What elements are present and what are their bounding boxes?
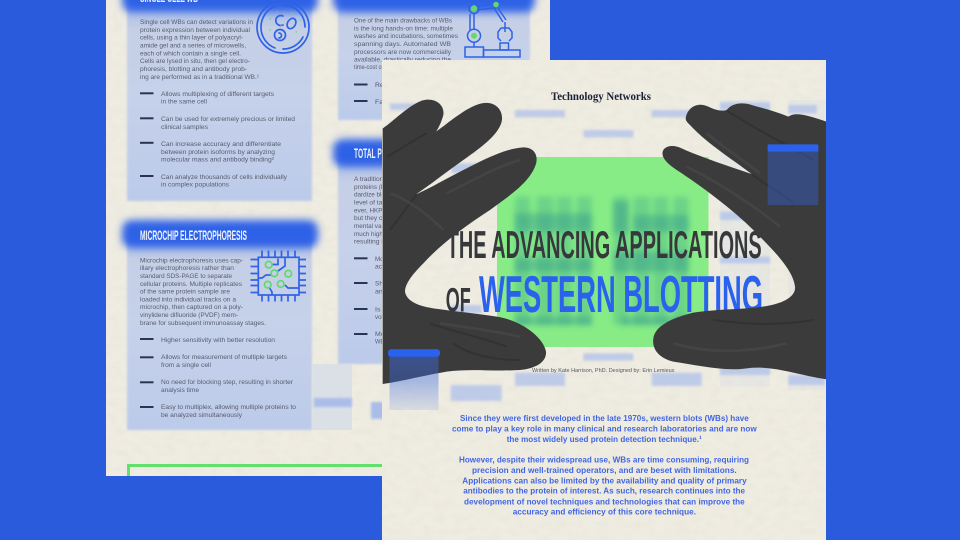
panel: automated WB: is the long hands-on time: multiple [354, 26, 453, 32]
icon: microchip [250, 250, 306, 302]
intro text: development of novel techniques and technologies that can improve the [464, 496, 745, 506]
title: OF [446, 282, 471, 320]
panel: automated WB: time-cost of the process [354, 64, 415, 71]
blue overlay square and bar, top right [768, 144, 818, 205]
intro text: However, despite their widespread use, WBs are time consuming, requiring [459, 455, 749, 465]
panel: microchip electrophoresis: from a single cell [161, 362, 212, 369]
panel: single cell WB: Can be used for extremely precious or limited [161, 116, 295, 123]
icon: cell [257, 1, 309, 53]
panel: automated WB: washes and incubations, sometimes [353, 33, 459, 40]
blue overlay and bar, bottom left [388, 349, 440, 410]
panel: microchip electrophoresis: brane for subsequent immunoassay stages. [140, 320, 266, 327]
icon: robot arm [465, 2, 520, 57]
panel: total protein normalization: WB quantitation [375, 338, 415, 346]
panel: total protein normalization [326, 132, 382, 365]
panel: microchip electrophoresis: vinylidene difluoride (PVDF) mem- [140, 312, 238, 319]
panel: total protein normalization: resulting in saturation [354, 238, 418, 246]
panel: single cell WB: Allows multiplexing of different targets [161, 91, 275, 98]
panel: single cell WB: in complex populations [161, 182, 230, 188]
panel: microchip electrophoresis: Microchip electrophoresis uses cap- [140, 257, 243, 264]
intro text [452, 413, 757, 517]
panel: microchip electrophoresis: Easy to multiplex, allowing multiple proteins to [161, 404, 296, 411]
panel: automated WB [333, 0, 535, 120]
back page [106, 0, 550, 476]
left glove [383, 100, 546, 384]
panel: microchip electrophoresis: MICROCHIP ELECTROPHORESIS [140, 227, 247, 243]
front page [382, 60, 827, 540]
panel: microchip electrophoresis: illary electrophoresis rather than [140, 265, 234, 272]
panel: single cell WB: amide gel and a series of microwells, [140, 42, 246, 50]
panel: total protein normalization: but they can also be experi- [354, 215, 434, 222]
panel: automated WB: spanning days. Automated WB [354, 41, 452, 48]
panel: total protein normalization: dardize blots and normalize the [354, 192, 442, 199]
panel: automated WB: One of the main drawbacks of WBs [354, 18, 453, 24]
panel: microchip electrophoresis: No need for blocking step, resulting in shorter [161, 379, 294, 386]
intro text: Since they were first developed in the late 1970s, western blots (WBs) have [460, 413, 749, 423]
intro text: come to play a key role in many clinical and research laboratories and are now [452, 424, 757, 434]
panel: single cell WB: protein expression between individual [140, 27, 251, 34]
intro text: Applications can also be limited by the availability and quality of primary [462, 475, 747, 485]
panel: microchip electrophoresis: Allows for measurement of multiple targets [161, 354, 288, 361]
intro text: the most widely used protein detection technique.¹ [507, 434, 702, 444]
panel: total protein normalization: proteins (HKPs) to standardize [354, 184, 442, 191]
intro text: accuracy and efficiency of this core technique. [513, 507, 696, 517]
panel: total protein normalization: much higher expression levels, [354, 231, 440, 238]
logo: Technology Networks: Technology Networks [551, 89, 651, 103]
intro text: precision and well-trained operators, and are beset with limitations. [472, 465, 737, 475]
faint gel bands on back page [313, 364, 385, 430]
panel: single cell WB: ing are performed as in a traditional WB.¹ [140, 74, 260, 81]
panel: total protein normalization: TOTAL PROTEIN [354, 145, 407, 161]
panel: single cell WB: Can increase accuracy and differentiate [161, 141, 281, 148]
western blot lanes [515, 197, 688, 325]
panel: single cell WB: each of which contain a single cell. [140, 50, 241, 57]
panel: single cell WB [122, 0, 318, 201]
right glove [653, 103, 827, 379]
panel: single cell WB: Cells are lysed in situ, then gel electro- [140, 58, 250, 65]
panel: microchip electrophoresis: of the same protein sample are [140, 289, 230, 296]
panel: single cell WB: phoresis, blotting and antibody prob- [140, 66, 247, 73]
panel: single cell WB: in the same cell [161, 99, 208, 106]
panel: total protein normalization: analysis time [375, 288, 415, 296]
faint gel bands on front page [390, 100, 825, 401]
panel: total protein normalization: ever, HKPs can vary widely, [354, 208, 432, 214]
panel: total protein normalization: Shorter assay [375, 280, 416, 288]
panel: automated WB: processors are now commercially [354, 49, 452, 56]
green gel rectangle [497, 157, 708, 347]
panel: microchip electrophoresis [122, 220, 318, 430]
title [446, 231, 762, 312]
panel: automated WB: Faster results [375, 99, 418, 106]
panel: microchip electrophoresis: loaded into individual tracks on a [140, 296, 236, 303]
panel: single cell WB: between protein isoforms by analyzing [161, 149, 275, 156]
panel: automated WB: Reduced time [375, 82, 417, 89]
intro text: antibodies to the protein of interest. As such, research continues into the [463, 486, 745, 496]
panel: total protein normalization: level of target proteins. How- [354, 200, 438, 206]
panel: microchip electrophoresis: Higher sensitivity with better resolution [161, 337, 275, 344]
panel: microchip electrophoresis: microchip, then captured on a poly- [140, 304, 243, 311]
panel: single cell WB: cells, using a thin layer of polyacryl- [140, 35, 243, 42]
panel: single cell WB: Single cell WBs can detect variations in [140, 19, 253, 26]
panel: total protein normalization: Is not limited [375, 306, 415, 314]
panel: microchip electrophoresis: standard SDS-PAGE to separate [140, 273, 232, 280]
panel: total protein normalization: mental variables and have [354, 223, 428, 230]
credit line: Written by Kate Harrison, PhD. Designed by: Erin Lemieux [532, 368, 675, 374]
panel: single cell WB: Can analyze thousands of cells individually [161, 174, 288, 181]
gloved hands [383, 100, 827, 384]
panel: total protein normalization: volume of load [375, 314, 415, 321]
panel: total protein normalization: A traditional approach is to use [354, 176, 444, 183]
panel: total protein normalization: More reliable [375, 331, 415, 338]
panel: total protein normalization: More sensitive [375, 256, 415, 263]
panel: automated WB: available, drastically reducing the [354, 56, 451, 64]
panel: single cell WB: molecular mass and antibody binding² [161, 156, 275, 164]
green outlined box [127, 464, 382, 476]
panel: single cell WB: clinical samples [161, 124, 209, 131]
panel: microchip electrophoresis: cellular proteins. Multiple replicates [140, 281, 243, 288]
panel: microchip electrophoresis: be analyzed simultaneously [161, 412, 243, 419]
panel: microchip electrophoresis: analysis time [161, 387, 199, 394]
panel: total protein normalization: accurate data [375, 264, 415, 270]
